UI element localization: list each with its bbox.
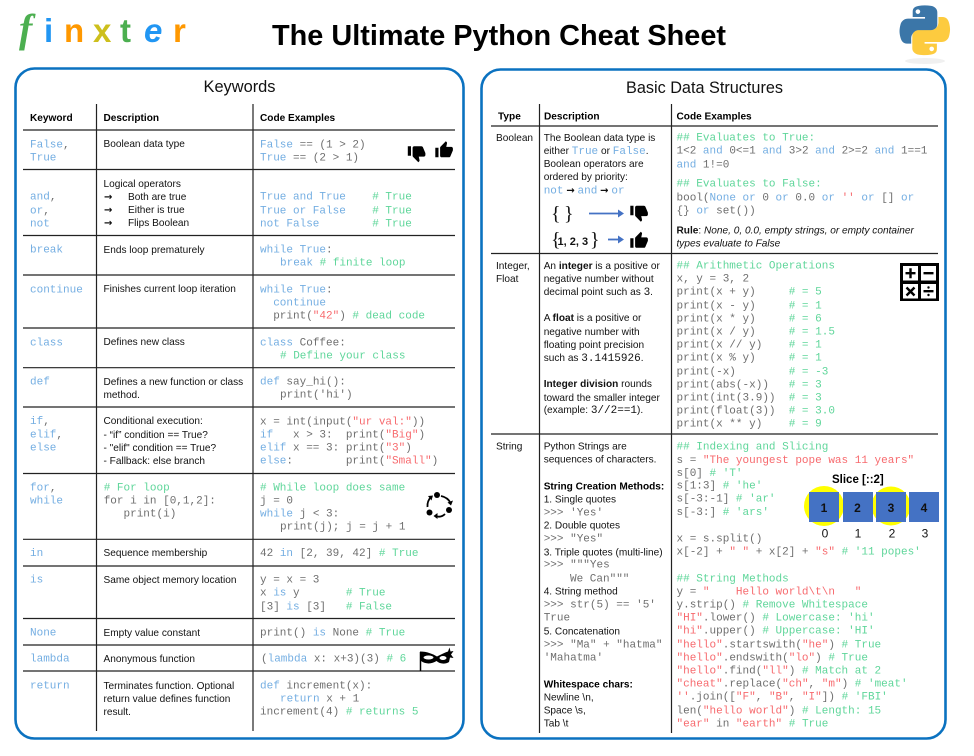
table header: Description — [104, 113, 159, 124]
row: integer, float: negative number without — [544, 274, 654, 285]
row: False, True: True == (2 > 1) — [260, 152, 359, 164]
diagram: slice: 4 — [921, 501, 928, 515]
row: boolean: The Boolean data type is — [544, 133, 655, 144]
row: string: ''.join(["F", "B", "I"]) # 'FBI' — [676, 692, 888, 704]
row: string: Newline \n, — [544, 692, 594, 704]
row: integer, float: ## Arithmetic Operations — [676, 260, 835, 272]
row: boolean: not → and → or — [544, 186, 625, 198]
row: lambda: Anonymous function — [104, 654, 195, 665]
diagram: slice: 1 — [821, 501, 828, 515]
row: in: 42 in [2, 39, 42] # True — [260, 548, 418, 560]
icon: thumbs up — [435, 141, 453, 157]
row: integer, float: print(float(3)) # = 3.0 — [676, 406, 835, 418]
diagram: empty set evaluates false: } — [564, 203, 574, 225]
row: and, or, not: Flips Boolean — [128, 218, 189, 229]
table header: Code Examples — [676, 112, 752, 122]
row: integer, float: print(x % y) # = 1 — [676, 352, 822, 364]
row: string: 5. Concatenation — [544, 626, 620, 638]
row: string: 3. Triple quotes (multi-line) — [544, 548, 663, 558]
row: string: s[1:3] # 'he' — [676, 480, 762, 492]
row: and, or, not: Both are true — [128, 192, 187, 203]
logo: finxter: e — [144, 12, 162, 49]
row: and, or, not: → — [104, 218, 112, 229]
row: string: sequences of characters. — [544, 454, 656, 466]
row: if, elif, else: if x > 3: print("Big") — [260, 430, 425, 442]
row: break: while True: — [260, 244, 333, 256]
row: string: Whitespace chars: — [544, 680, 633, 690]
logo: finxter: f — [19, 6, 36, 51]
table header: Keyword — [30, 113, 73, 124]
heading: keywords: Keywords — [204, 77, 276, 96]
row: string: "HI".lower() # Lowercase: 'hi' — [676, 612, 875, 624]
row: return: return value defines function — [104, 694, 230, 705]
row: boolean — [496, 132, 928, 251]
row: integer, float: negative number with — [544, 327, 640, 338]
row: in: in — [30, 548, 43, 560]
row: integer, float: Integer, — [496, 261, 530, 272]
row: class: class — [30, 338, 63, 350]
row: is: y = x = 3 — [260, 574, 319, 586]
diagram: empty set evaluates false: { — [551, 203, 561, 225]
row: string: "cheat".replace("ch", "m") # 'meat' — [676, 678, 908, 690]
logo: finxter: t — [120, 12, 131, 49]
row: string: ## Indexing and Slicing — [676, 442, 828, 454]
row: and, or, not: not False # True — [260, 218, 412, 230]
row: is: is — [30, 574, 43, 586]
row: integer, float: print(x ** y) # = 9 — [676, 418, 822, 430]
row: for, while: # For loop — [104, 482, 170, 494]
row: for, while: for i in [0,1,2]: — [104, 496, 216, 508]
row: string: Python Strings are — [544, 442, 627, 452]
row: string: >>> """Yes — [544, 560, 610, 572]
row: string: String — [496, 442, 522, 452]
row: break — [30, 244, 405, 270]
row: continue: continue — [273, 298, 326, 310]
diagram: slice: Slice [::2] — [832, 474, 884, 486]
panel: basic data structures — [482, 70, 946, 738]
row: for, while: print(i) — [124, 508, 176, 520]
row: and, or, not: True or False # True — [260, 206, 412, 218]
row: boolean: {} or set()) — [676, 206, 756, 218]
diagram: slice: 2 — [889, 526, 896, 540]
row: integer, float: decimal point such as 3. — [544, 287, 653, 299]
row: continue: continue — [30, 284, 83, 296]
row: string — [496, 442, 939, 730]
row: None: print() is None # True — [260, 628, 405, 640]
row: boolean: ordered by priority: — [544, 172, 628, 183]
row: def: print('hi') — [280, 390, 353, 402]
row: string: >>> str(5) == '5' — [544, 600, 656, 612]
row: string: s = "The youngest pope was 11 years" — [676, 455, 914, 467]
row: False, True: False == (1 > 2) — [260, 140, 366, 152]
row: boolean: bool(None or 0 or 0.0 or '' or [] or — [676, 192, 914, 204]
row: boolean: either True or False. — [544, 146, 649, 158]
table header: Description — [544, 112, 600, 122]
row: integer, float: print(x // y) # = 1 — [676, 340, 822, 352]
row: and, or, not — [30, 179, 412, 230]
row: return: Terminates function. Optional — [104, 681, 234, 692]
row: and, or, not: Logical operators — [104, 179, 181, 190]
diagram: slice: 0 — [822, 526, 829, 540]
row: if, elif, else: if, — [30, 416, 50, 428]
row: integer, float — [496, 260, 939, 430]
row: integer, float: (example: 3//2==1). — [544, 405, 643, 417]
row: None: Empty value constant — [104, 628, 200, 639]
row: string: Tab \t — [544, 718, 569, 730]
row: and, or, not: and, — [30, 192, 56, 204]
row: if, elif, else: x = int(input("ur val:")) — [260, 416, 425, 428]
row: is — [30, 574, 392, 614]
row: if, elif, else: elif x == 3: print("3") — [260, 442, 412, 454]
icon: loop — [426, 492, 453, 519]
row: False, True — [30, 139, 453, 164]
row: integer, float: print(x + y) # = 5 — [676, 286, 822, 298]
row: class: Defines new class — [104, 337, 185, 348]
row: continue: print("42") # dead code — [273, 310, 425, 322]
row: return — [30, 680, 418, 718]
diagram: non-empty set evaluates true: { — [551, 229, 561, 251]
row: string: x[-2] + " " + x[2] + "s" # '11 popes' — [676, 546, 921, 558]
row: string: 1. Single quotes — [544, 494, 616, 506]
row: string: 4. String method — [544, 586, 618, 598]
row: boolean: 1<2 and 0<=1 and 3>2 and 2>=2 and 1==1 — [676, 146, 928, 158]
row: string: "hello".startswith("he") # True — [676, 640, 881, 652]
row: continue: Finishes current loop iteration — [104, 284, 236, 295]
row: integer, float: print(int(3.9)) # = 3 — [676, 392, 822, 404]
row: return: result. — [104, 707, 131, 718]
row: if, elif, else: - "elif" condition == True? — [104, 443, 217, 454]
row: string: >>> "Ma" + "hatma" — [544, 640, 663, 652]
diagram: slice: 2 — [854, 501, 861, 515]
row: integer, float: print(abs(-x)) # = 3 — [676, 380, 822, 392]
row: integer, float: A float is a positive or — [544, 313, 642, 324]
row: continue — [30, 284, 425, 322]
row: string: 'Mahatma' — [544, 652, 603, 664]
row: and, or, not: or, — [30, 206, 50, 218]
row: string: s[-3:-1] # 'ar' — [676, 494, 776, 506]
row: def: Defines a new function or class — [104, 377, 243, 388]
row: string: s[-3:] # 'ars' — [676, 507, 769, 519]
row: break: break — [30, 244, 63, 256]
row: class: class Coffee: — [260, 338, 346, 350]
diagram: slice: 1 — [855, 526, 862, 540]
row: integer, float: floating point precision — [544, 340, 644, 351]
row: return: return — [30, 680, 70, 692]
table header: Type — [498, 112, 521, 122]
row: integer, float: x, y = 3, 2 — [676, 274, 749, 286]
row: string: "hello".find("ll") # Match at 2 — [676, 666, 881, 678]
row: None: None — [30, 628, 56, 640]
row: break: Ends loop prematurely — [104, 245, 205, 256]
row: boolean: ## Evaluates to False: — [676, 178, 822, 190]
row: if, elif, else: - “if” condition == True? — [104, 430, 208, 441]
row: integer, float: print(x * y) # = 6 — [676, 314, 822, 326]
row: string: "hi".upper() # Uppercase: 'HI' — [676, 626, 875, 638]
row: integer, float: Integer division rounds — [544, 379, 652, 390]
row: boolean: types evaluate to False — [676, 238, 781, 250]
row: if, elif, else: elif, — [30, 430, 63, 442]
row: string: len("hello world") # Length: 15 — [676, 706, 881, 718]
row: class — [30, 337, 405, 362]
heading: basic data structures: Basic Data Structures — [626, 78, 783, 97]
row: is: [3] is [3] # False — [260, 602, 392, 614]
row: and, or, not: → — [104, 192, 112, 203]
row: lambda: lambda — [30, 654, 70, 666]
row: break: break # finite loop — [280, 258, 405, 270]
row: string: ## String Methods — [676, 574, 789, 586]
row: for, while: j = 0 — [260, 496, 293, 508]
row: def: def say_hi(): — [260, 376, 346, 388]
row: boolean: and 1!=0 — [676, 160, 729, 172]
row: False, True: False, — [30, 140, 70, 152]
row: return: return x + 1 — [280, 694, 360, 706]
row: lambda — [30, 648, 454, 671]
row: integer, float: toward the smaller integer — [544, 393, 660, 404]
diagram: empty set evaluates false — [551, 203, 648, 225]
diagram: non-empty set evaluates true: 1, 2, 3 — [558, 236, 588, 248]
row: lambda: (lambda x: x+3)(3) # 6 — [261, 654, 406, 666]
row: string: "ear" in "earth" # True — [676, 718, 828, 730]
row: False, True: True — [30, 152, 56, 164]
row: for, while: print(j); j = j + 1 — [280, 522, 406, 534]
row: for, while: # While loop does same — [260, 482, 405, 494]
row: integer, float: print(x - y) # = 1 — [676, 300, 822, 312]
diagram: non-empty set evaluates true: } — [590, 229, 600, 251]
row: string: True — [544, 612, 570, 624]
row: string: >>> 'Yes' — [544, 508, 603, 520]
icon: mask — [420, 648, 454, 671]
row: in: Sequence membership — [104, 548, 208, 559]
table header — [30, 113, 336, 124]
row: boolean: Rule: None, 0, 0.0, empty strings, or empty container — [676, 226, 914, 236]
row: None — [30, 628, 405, 640]
row: boolean: Boolean — [496, 133, 533, 144]
row: and, or, not: → — [104, 205, 112, 216]
table header — [498, 112, 752, 122]
row: def — [30, 376, 353, 402]
title: The Ultimate Python Cheat Sheet — [272, 20, 726, 52]
row: class: # Define your class — [280, 350, 405, 362]
diagram: slice — [804, 474, 939, 540]
diagram: slice: 3 — [888, 501, 895, 515]
row: and, or, not: True and True # True — [260, 192, 412, 204]
row: string: x = s.split() — [676, 534, 762, 546]
row: string: We Can""" — [570, 574, 629, 586]
row: boolean: Boolean operators are — [544, 159, 644, 170]
row: def: method. — [104, 390, 140, 401]
row: if, elif, else — [30, 416, 438, 468]
row: if, elif, else: - Fallback: else branch — [104, 456, 205, 467]
table header: Code Examples — [260, 113, 336, 124]
icon: python logo — [900, 5, 950, 64]
row: integer, float: print(-x) # = -3 — [676, 366, 828, 378]
row: for, while: for, — [30, 482, 56, 494]
row: if, elif, else: Conditional execution: — [104, 416, 203, 427]
row: return: increment(4) # returns 5 — [260, 706, 418, 718]
row: and, or, not: Either is true — [128, 205, 185, 216]
logo: finxter: x — [93, 12, 112, 49]
row: continue: while True: — [260, 284, 333, 296]
row: for, while: while — [30, 496, 63, 508]
row: string: y.strip() # Remove Whitespace — [676, 600, 868, 612]
row: string: String Creation Methods: — [544, 482, 664, 492]
row: if, elif, else: else — [30, 442, 56, 454]
icon: thumbs down — [408, 146, 425, 162]
row: is: Same object memory location — [104, 575, 236, 586]
row: integer, float: Float — [496, 274, 519, 285]
row: if, elif, else: else: print("Small") — [260, 456, 438, 468]
row: boolean: ## Evaluates to True: — [676, 132, 815, 144]
icon: calculator — [900, 263, 939, 301]
row: integer, float: An integer is a positive or — [544, 261, 660, 272]
row: integer, float: such as 3.1415926. — [544, 353, 644, 365]
row: string: s[0] # 'T' — [676, 468, 743, 480]
row: False, True: Boolean data type — [104, 139, 185, 150]
row: string: 2. Double quotes — [544, 520, 620, 532]
row: and, or, not: not — [30, 218, 50, 230]
row: string: >>> "Yes" — [544, 534, 603, 546]
logo: finxter: r — [173, 12, 186, 49]
row: integer, float: print(x / y) # = 1.5 — [676, 326, 835, 338]
row: for, while — [30, 482, 453, 534]
row: def: def — [30, 376, 50, 388]
row: in — [30, 548, 418, 560]
diagram: non-empty set evaluates true — [551, 229, 648, 251]
panel: keywords — [16, 68, 464, 738]
diagram: slice: 3 — [922, 526, 929, 540]
row: string: y = " Hello world\t\n " — [676, 586, 861, 598]
row: return: def increment(x): — [260, 680, 372, 692]
logo: finxter: i — [44, 12, 53, 49]
row: is: x is y # True — [260, 588, 385, 600]
row: string: Space \s, — [544, 706, 586, 716]
logo: finxter — [19, 6, 186, 51]
row: string: "hello".endswith("lo") # True — [676, 652, 868, 664]
logo: finxter: n — [64, 12, 84, 49]
row: for, while: while j < 3: — [260, 508, 339, 520]
